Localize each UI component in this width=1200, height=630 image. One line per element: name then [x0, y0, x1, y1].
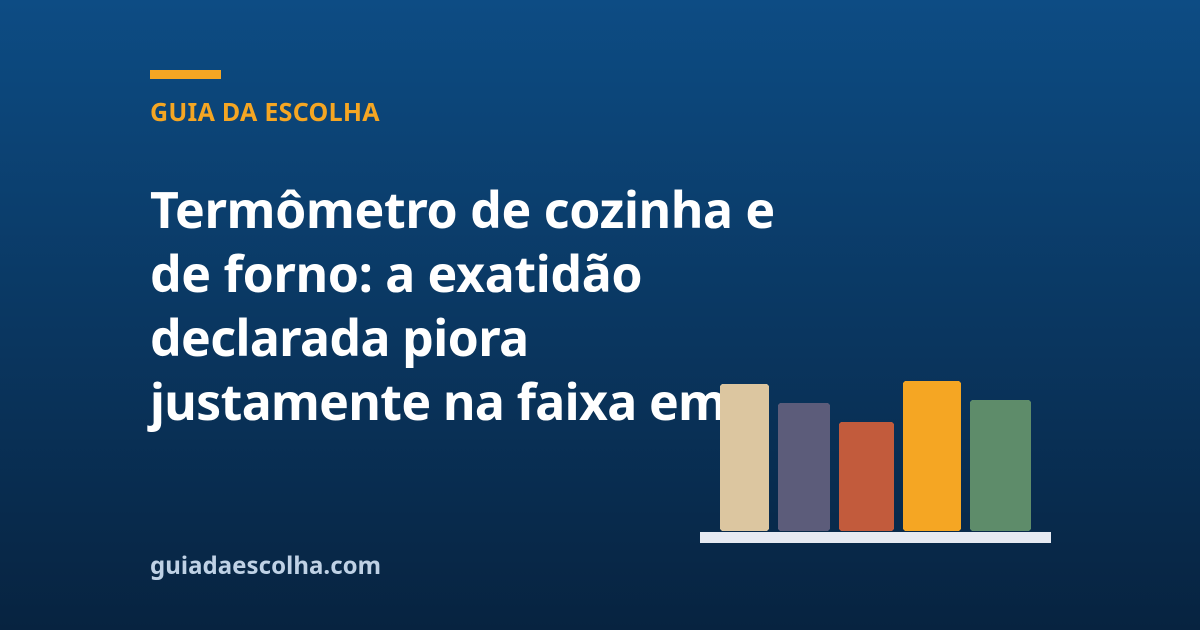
shelf baseline: [700, 532, 1051, 543]
bar 1: [720, 384, 769, 531]
bar 4: [903, 381, 961, 531]
title: Termômetro de cozinha e: [150, 175, 775, 243]
brand label: GUIA DA ESCOLHA: [150, 95, 380, 129]
accent bar: [150, 70, 221, 79]
title: justamente na faixa em: [150, 367, 726, 435]
bar chart illustration: [700, 381, 1051, 543]
title: [147, 175, 775, 435]
bar 3: [839, 422, 894, 531]
bar 2: [778, 403, 830, 531]
title: declarada piora: [150, 303, 528, 371]
bar 5: [970, 400, 1031, 531]
site url: guiadaescolha.com: [150, 549, 381, 582]
title: de forno: a exatidão: [150, 239, 642, 307]
